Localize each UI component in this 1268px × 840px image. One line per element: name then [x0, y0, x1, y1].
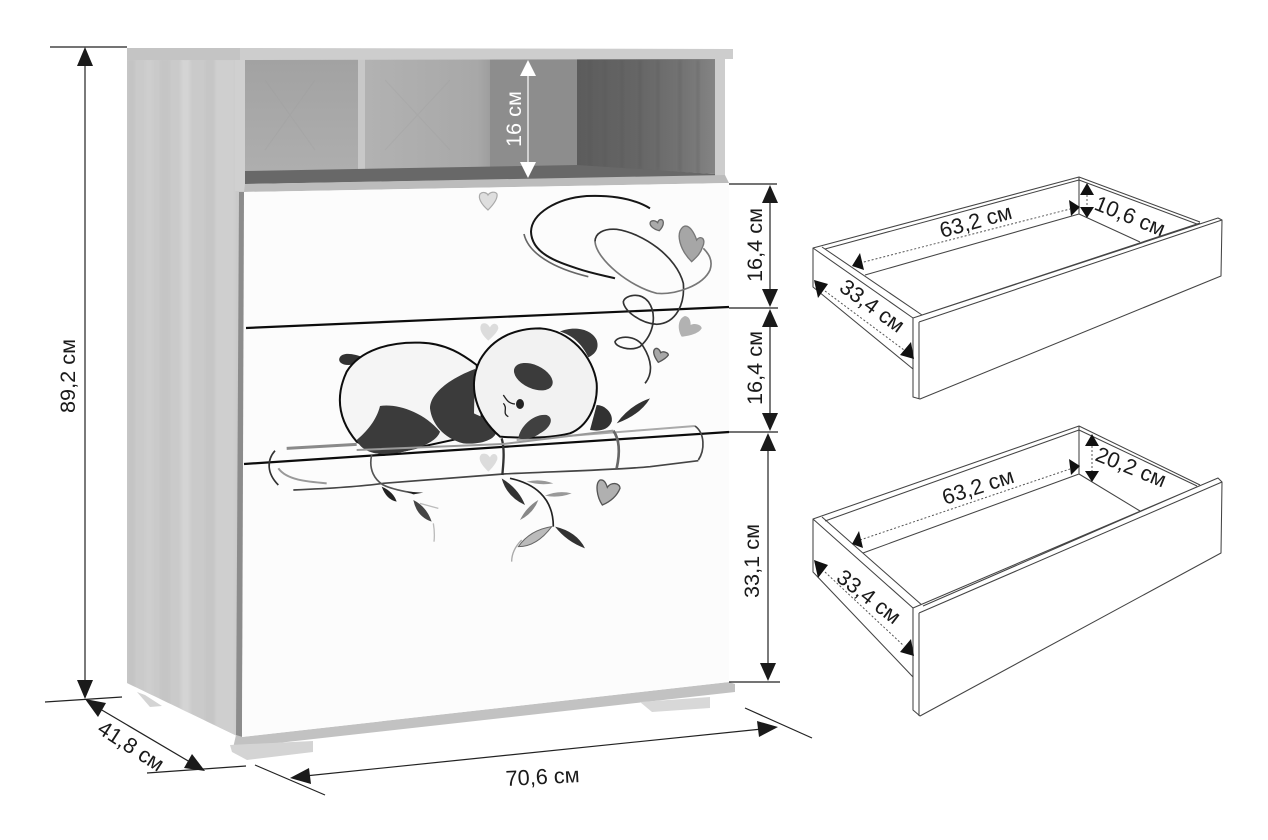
drawer gaps [244, 307, 729, 464]
right leaf sprig [502, 478, 585, 562]
side panel with wood grain [127, 59, 245, 739]
dimension: shelf height 16 см: 16 см [501, 91, 526, 147]
top board [240, 48, 733, 60]
big heart [679, 226, 704, 262]
lower drawer arrowheads [814, 434, 1099, 656]
upper drawer arrowheads [814, 183, 1094, 359]
dimension: width 70,6 см: 70,6 см [505, 762, 580, 791]
panda nose [516, 399, 524, 409]
dimension: total height 89,2 см [45, 47, 127, 702]
panda upper eye patch [510, 357, 557, 396]
niche back pattern [265, 80, 450, 150]
heart under gap [480, 454, 497, 472]
white drawer fronts [242, 183, 729, 737]
panda body patch [357, 406, 440, 454]
left rear foot [137, 692, 162, 707]
upper drawer dotted guides [825, 195, 1087, 350]
panda arm [430, 369, 497, 444]
panda head [474, 328, 597, 438]
dimension: top drawer 16,4 см [729, 184, 778, 308]
label 10,6 см: 10,6 см [1091, 190, 1169, 241]
label 20,2 см: 20,2 см [1092, 441, 1170, 492]
panda illustration [269, 323, 703, 562]
lower drawer side wall [813, 519, 913, 677]
black swirl [531, 196, 650, 278]
lower drawer diagram [813, 426, 1222, 716]
label 33,4 см: 33,4 см [832, 564, 906, 629]
dimension: width 70,6 см [255, 708, 812, 795]
dark wall grain [590, 60, 698, 173]
ribbon lower loop [595, 242, 711, 294]
niche back panels [245, 59, 358, 171]
right leaf [617, 398, 650, 423]
bamboo front stroke [357, 431, 613, 450]
lower drawer dotted guides [825, 446, 1092, 646]
niche lower lip [244, 175, 729, 192]
niche dark right wall [577, 59, 715, 174]
panda far arm [590, 405, 612, 431]
panda left ear [339, 354, 363, 365]
panda head ear [560, 329, 598, 357]
lower drawer rear rails [813, 426, 1200, 606]
dimension: depth 41,8 см [85, 699, 246, 776]
front left foot [230, 741, 313, 760]
chest of drawers [127, 48, 735, 760]
gray heart [679, 316, 702, 337]
label 63,2 см: 63,2 см [937, 199, 1015, 243]
panda lower eye patch [518, 415, 551, 439]
dimension: shelf height 16 см [501, 60, 536, 178]
dimension: middle drawer 16,4 см [729, 309, 778, 432]
dimension: bottom drawer 33,1 см [729, 433, 780, 682]
panda body [340, 343, 483, 455]
swirls and hearts decoration [524, 196, 711, 383]
open shelf niche [244, 59, 729, 192]
heart by bamboo [597, 480, 620, 505]
lower gap [244, 432, 729, 464]
left leaf sprig [371, 455, 438, 542]
bamboo [269, 426, 703, 490]
plinth [233, 682, 735, 748]
upper gap [246, 307, 729, 328]
dimension: middle drawer 16,4 см: 16,4 см [742, 331, 767, 405]
upper drawer rear rails [813, 177, 1200, 315]
niche floor [245, 165, 715, 184]
heart on panda [480, 323, 498, 341]
top drawer heart [479, 192, 497, 210]
front right foot [640, 697, 710, 712]
drawer side seam [236, 192, 245, 737]
top board left end [127, 48, 240, 60]
gray outer swirl [524, 234, 588, 277]
upper drawer side wall [813, 248, 913, 369]
upper drawer diagram [813, 177, 1222, 399]
lower drawer front panel [913, 478, 1222, 716]
label 63,2 см: 63,2 см [939, 463, 1017, 510]
niche right post [715, 59, 725, 176]
curling ribbon [595, 229, 684, 383]
upper drawer front panel [913, 218, 1222, 399]
upper drawer interior edges [865, 177, 1140, 275]
lower drawer interior edges [863, 426, 1140, 553]
small heart [650, 220, 663, 231]
dimension: depth 41,8 см: 41,8 см [93, 715, 169, 776]
dimension: bottom drawer 33,1 см: 33,1 см [739, 524, 764, 598]
dimension: top drawer 16,4 см: 16,4 см [742, 208, 767, 282]
panda mouth [503, 395, 515, 417]
dimension: total height 89,2 см: 89,2 см [55, 339, 80, 413]
label 33,4 см: 33,4 см [835, 274, 910, 338]
small lower heart [654, 348, 668, 362]
